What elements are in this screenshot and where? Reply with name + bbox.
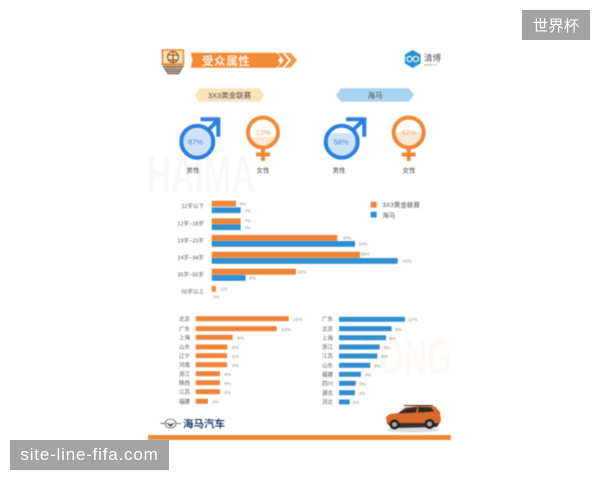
bar chart: age distribution: 6% xyxy=(240,202,246,206)
legend: 海马 xyxy=(382,210,395,219)
bar chart: age distribution: 12岁以下 xyxy=(181,202,204,210)
bar chart: 3X3 provinces: 4% xyxy=(224,381,232,387)
bar chart: Haima provinces xyxy=(322,315,418,406)
gender labels: 女性 xyxy=(402,166,416,174)
bar chart: Haima provinces: 江苏 xyxy=(322,352,333,360)
bar chart: age distribution xyxy=(178,201,412,300)
gender labels: 男性 xyxy=(332,166,346,174)
bar chart: Haima provinces: 3% xyxy=(359,382,367,388)
icon: female 13% xyxy=(248,118,278,161)
bar chart: Haima provinces: 福建 xyxy=(322,370,333,378)
bar chart: 3X3 provinces xyxy=(179,315,303,406)
tag: site-line-fifa.com xyxy=(10,440,169,470)
icon: male 87% xyxy=(181,119,218,158)
bar chart: Haima provinces: 6% xyxy=(381,354,389,360)
bar chart: Haima provinces: 北京 xyxy=(322,325,333,333)
bar chart: Haima provinces: 四川 xyxy=(322,380,333,388)
bar chart: 3X3 provinces: 15% xyxy=(293,317,303,323)
logo: 清博 xyxy=(405,50,442,68)
bar chart: 3X3 provinces: 北京 xyxy=(179,315,190,323)
label: Haima xyxy=(336,88,414,102)
bar chart: age distribution: 34% xyxy=(358,242,368,246)
footer band xyxy=(148,435,451,440)
bar chart: Haima provinces: 浙江 xyxy=(322,343,333,351)
bar chart: Haima provinces: 3% xyxy=(358,391,366,397)
main infographic xyxy=(147,48,452,441)
bar chart: Haima provinces: 湖北 xyxy=(322,389,333,397)
icon: basketball hoop xyxy=(162,50,184,74)
icon: male 58% xyxy=(326,119,364,158)
bar chart: 3X3 provinces: 5% xyxy=(232,345,240,351)
bar chart: age distribution: 30% xyxy=(342,236,352,240)
bar chart: age distribution: 20% xyxy=(298,270,307,274)
bar chart: age distribution: 24岁−34岁 xyxy=(178,254,204,262)
icon: female 42% xyxy=(394,118,424,161)
legend xyxy=(371,200,420,219)
bar chart: 3X3 provinces: 江苏 xyxy=(179,388,190,396)
bar chart: Haima provinces: 11% xyxy=(408,317,418,323)
bar chart: 3X3 provinces: 4% xyxy=(224,372,232,378)
logo: Haima Auto xyxy=(160,418,225,430)
bar chart: age distribution: 7% xyxy=(244,208,251,214)
bar chart: 3X3 provinces: 辽宁 xyxy=(179,352,190,360)
bar chart: age distribution: 35% xyxy=(360,252,370,256)
icon: female 13%: 13% xyxy=(255,128,271,137)
bar chart: Haima provinces: 5% xyxy=(374,364,382,370)
icon: male 87%: 87% xyxy=(188,138,203,146)
bar chart: 3X3 provinces: 5% xyxy=(232,354,240,360)
logo: 清博: gsdata.cn xyxy=(424,62,437,66)
bar chart: 3X3 provinces: 上海 xyxy=(179,334,190,342)
bar chart: age distribution: 7% xyxy=(244,218,251,224)
bar chart: age distribution: 44% xyxy=(402,258,412,264)
label: 3X3 league xyxy=(195,88,264,102)
bar chart: 3X3 provinces: 4% xyxy=(224,390,232,396)
icon: female 42%: 42% xyxy=(401,128,417,137)
gender labels xyxy=(186,166,416,174)
bar chart: age distribution: 35岁−50岁 xyxy=(178,270,204,278)
gender labels: 男性 xyxy=(186,166,200,174)
tag: 世界杯 xyxy=(522,10,590,40)
bar chart: Haima provinces: 上海 xyxy=(322,334,333,342)
bar chart: 3X3 provinces: 广东 xyxy=(179,325,190,333)
tag: 世界杯: 世界杯 xyxy=(533,18,579,35)
bar chart: age distribution: 8% xyxy=(250,276,256,280)
tag: site-line-fifa.com: site-line-fifa.com xyxy=(20,445,159,464)
bar chart: Haima provinces: 8% xyxy=(389,336,397,342)
legend: 3X3黄金联赛 xyxy=(382,200,420,209)
bar chart: age distribution: 0% xyxy=(213,294,220,300)
title banner xyxy=(191,53,297,68)
logo: 清博: 清博 xyxy=(424,53,442,63)
bar chart: 3X3 provinces: 6% xyxy=(237,336,245,342)
watermark: HAIMA: HAIMA xyxy=(147,146,255,204)
bar chart: 3X3 provinces: 陕西 xyxy=(179,379,190,387)
bar chart: 3X3 provinces: 13% xyxy=(281,327,291,333)
image: orange SUV xyxy=(386,406,441,432)
title banner: 受众属性 xyxy=(202,54,250,68)
bar chart: age distribution: 7% xyxy=(244,226,251,230)
watermark: SONG: SONG xyxy=(358,329,452,385)
bar chart: age distribution: 50岁以上 xyxy=(181,288,204,296)
label: 3X3 league: 3X3黄金联赛 xyxy=(208,90,252,100)
icon: male 58%: 58% xyxy=(333,138,349,146)
bar chart: age distribution: 1% xyxy=(221,286,228,292)
bar chart: 3X3 provinces: 山东 xyxy=(179,343,190,351)
bar chart: 3X3 provinces: 福建 xyxy=(179,398,190,406)
bar chart: age distribution: 19岁−23岁 xyxy=(178,236,204,244)
bar chart: Haima provinces: 山东 xyxy=(322,362,333,370)
bar chart: Haima provinces: 9% xyxy=(395,327,403,333)
bar chart: Haima provinces: 7% xyxy=(383,346,391,352)
bar chart: Haima provinces: 广东 xyxy=(322,315,333,323)
bar chart: age distribution: 12岁−18岁 xyxy=(178,220,204,228)
bar chart: 3X3 provinces: 浙江 xyxy=(179,370,190,378)
gender labels: 女性 xyxy=(256,166,270,174)
bar chart: Haima provinces: 4% xyxy=(364,372,372,378)
bar chart: 3X3 provinces: 2% xyxy=(212,400,220,406)
bar chart: Haima provinces: 2% xyxy=(352,400,360,406)
bar chart: 3X3 provinces: 河南 xyxy=(179,361,190,369)
label: Haima: 海马 xyxy=(368,90,382,100)
bar chart: Haima provinces: 河北 xyxy=(322,398,333,406)
logo: Haima Auto: 海马汽车 xyxy=(183,418,225,430)
bar chart: 3X3 provinces: 5% xyxy=(232,363,240,369)
